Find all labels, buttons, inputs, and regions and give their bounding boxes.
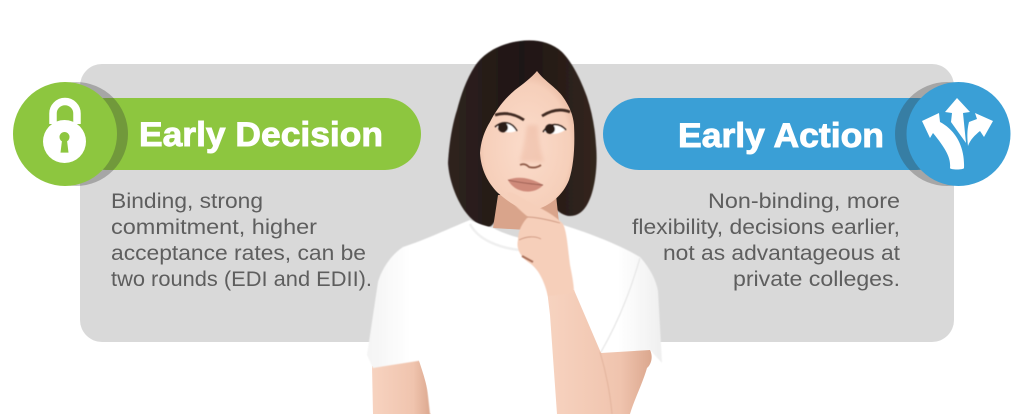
right forearm (547, 290, 652, 414)
text block: early action description: Non-binding, more (708, 190, 900, 213)
heading: early action: Early Action (678, 117, 884, 155)
icon: padlock (43, 102, 86, 163)
right eyebrow (542, 110, 570, 116)
t-shirt (367, 220, 662, 414)
panel: early action header (603, 82, 1010, 186)
heading: early decision: Early Decision (139, 116, 383, 154)
hand (507, 192, 574, 296)
lips (508, 178, 543, 192)
circle shadow (895, 82, 999, 186)
blue circle (906, 82, 1010, 186)
left eye (497, 124, 516, 132)
nostrils (520, 164, 541, 168)
person: thinking woman (367, 40, 662, 414)
text block: early action description: private colleges. (733, 268, 900, 291)
text block: early decision description: Binding, strong (111, 190, 263, 213)
text block: early decision description: commitment, higher (111, 216, 317, 239)
neck (493, 195, 560, 232)
hair (448, 40, 597, 227)
text block: early action description: flexibility, decisions earlier, (632, 216, 900, 239)
text block: early decision description: acceptance rates, can be (111, 242, 366, 265)
text block: early action description (632, 190, 900, 291)
face (480, 71, 574, 210)
icon: diverging arrows (922, 98, 993, 170)
cheek and nose shading (520, 125, 544, 162)
right eye (544, 126, 565, 134)
facial features (495, 110, 570, 192)
left arm (372, 358, 431, 414)
elbow crease (600, 352, 612, 414)
green circle (13, 82, 117, 186)
text block: early decision description (111, 190, 372, 291)
green pill (70, 98, 421, 170)
background panel (80, 64, 954, 342)
text block: early action description: not as advantageous at (663, 242, 900, 265)
blue pill (603, 98, 953, 170)
shirt folds (470, 224, 640, 352)
circle shadow (24, 82, 128, 186)
finger creases (519, 217, 560, 262)
left eyebrow (495, 114, 524, 120)
panel: early decision header (13, 82, 421, 186)
text block: early decision description: two rounds (EDI and EDII). (111, 268, 372, 291)
